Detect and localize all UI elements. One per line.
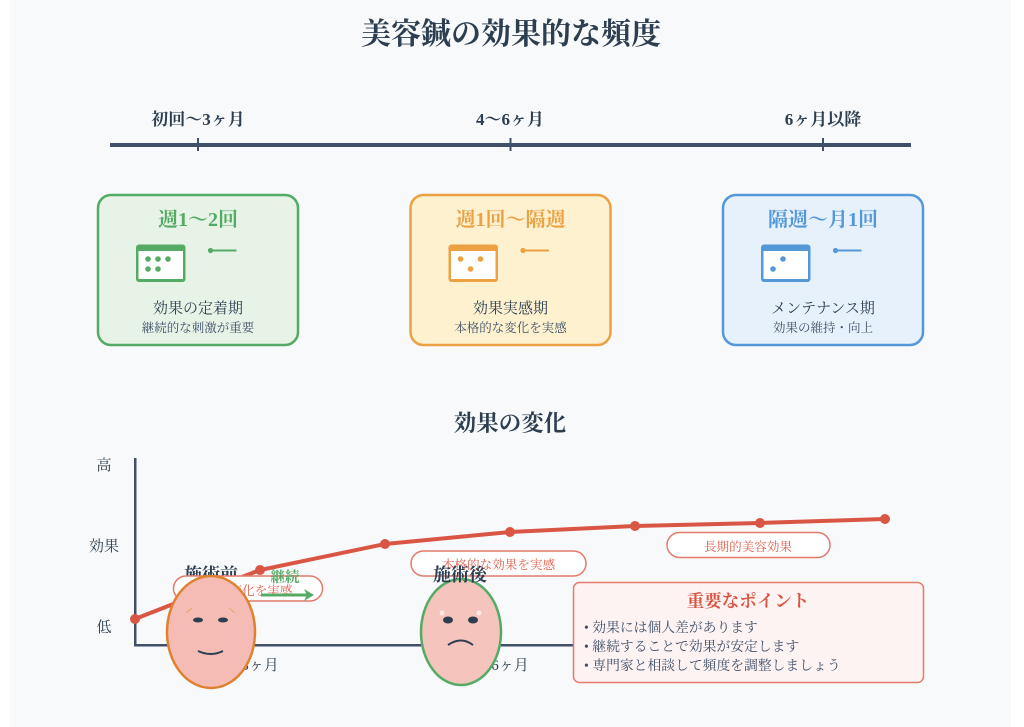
- key points list: • 効果には個人差があります: [584, 619, 758, 635]
- panel: second period frequency: [410, 195, 610, 345]
- x axis: [134, 644, 886, 646]
- x axis label: 6 months: 6ヶ月: [491, 657, 529, 674]
- y axis: [134, 458, 136, 646]
- label: before treatment: 施術前: [184, 565, 238, 585]
- card description: 本格的な変化を実感: [454, 320, 567, 335]
- card description: 継続的な刺激が重要: [142, 320, 255, 335]
- timeline: [110, 110, 911, 151]
- card phase label: 効果の定着期: [153, 300, 243, 317]
- key points list: [584, 619, 841, 673]
- title: 美容鍼の効果的な頻度: [361, 18, 661, 51]
- card heading: 週1〜2回: [158, 208, 238, 231]
- key points heading: 重要なポイント: [687, 591, 809, 611]
- timeline label: third period: 6ヶ月以降: [785, 110, 861, 129]
- callout: first change: [174, 576, 322, 601]
- y axis label: high: 高: [96, 456, 112, 474]
- card description: 効果の維持・向上: [773, 320, 873, 335]
- card heading: 週1回〜隔週: [456, 208, 566, 231]
- icon: calendar with five dots: [136, 244, 186, 282]
- callout: long-term effect: 長期的美容効果: [704, 539, 792, 554]
- panel: third period frequency: [723, 195, 923, 345]
- effect curve: [130, 514, 890, 624]
- timeline label: first period: 初回〜3ヶ月: [151, 110, 245, 129]
- key points list: • 継続することで効果が安定します: [584, 638, 799, 654]
- icon: calendar with two dots: [761, 244, 810, 282]
- chart: effect over time: [89, 456, 890, 674]
- y axis label: low: 低: [96, 619, 112, 636]
- card heading: 隔週〜月1回: [768, 208, 878, 231]
- callout: real effect: 本格的な効果を実感: [442, 557, 556, 572]
- face: before treatment: [167, 576, 255, 688]
- card phase label: 効果実感期: [473, 299, 548, 317]
- chart heading: 効果の変化: [454, 411, 566, 436]
- panel: first period frequency: [98, 195, 298, 345]
- callout: long-term effect: [667, 532, 830, 558]
- x axis label: 3 months: 3ヶ月: [241, 657, 279, 674]
- icon: needle: [520, 248, 549, 253]
- arrow: continuation: [261, 589, 314, 601]
- y axis label: effect: 効果: [89, 538, 119, 555]
- label: continuation: 継続: [270, 568, 300, 586]
- icon: needle: [208, 248, 236, 253]
- callout: real effect: [411, 551, 586, 576]
- key points list: • 専門家と相談して頻度を調整しましょう: [584, 657, 841, 673]
- label: after treatment: 施術後: [433, 565, 488, 585]
- panel: key points: [574, 582, 924, 682]
- icon: needle: [833, 248, 862, 253]
- timeline label: second period: 4〜6ヶ月: [476, 110, 544, 129]
- card phase label: メンテナンス期: [771, 300, 875, 317]
- face: after treatment: [421, 579, 501, 685]
- callout: first change: 変化を実感: [230, 583, 293, 598]
- icon: calendar with three dots: [448, 244, 498, 282]
